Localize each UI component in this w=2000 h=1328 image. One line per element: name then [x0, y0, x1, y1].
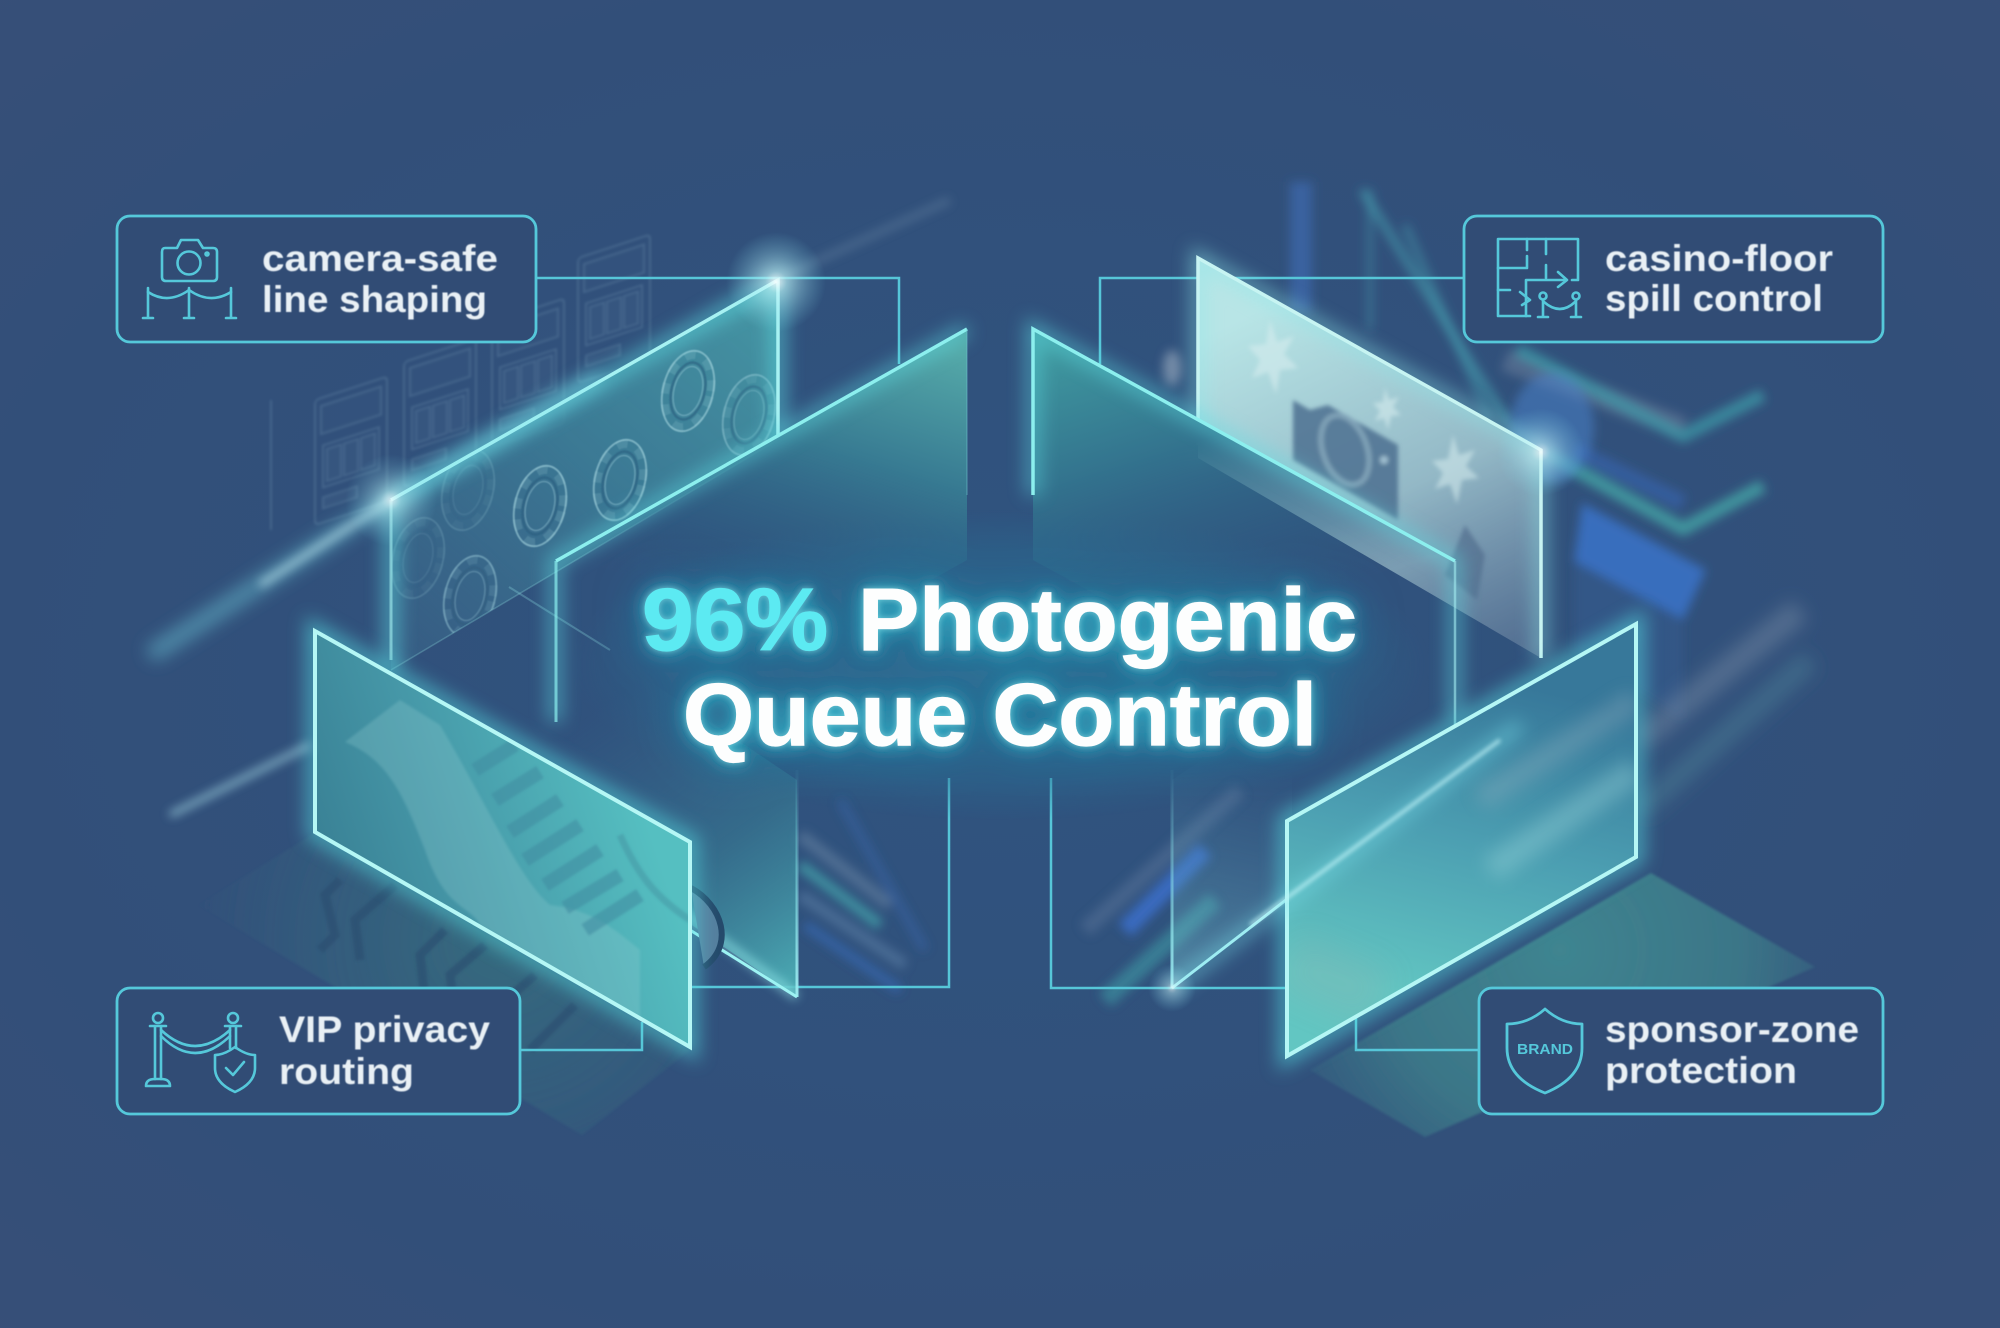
title highlight: 96%: 96% [642, 570, 828, 669]
label: protection [1605, 1050, 1797, 1091]
background illustration: blurred streaks left and centre [800, 790, 1240, 1000]
background illustration: blue block right [1510, 373, 1706, 720]
label: casino-floor [1605, 238, 1833, 279]
panel: front right, sponsor zone [1287, 624, 1636, 1056]
label [279, 1009, 490, 1092]
light streak: through left back panel [150, 200, 950, 655]
floor: right isometric plane [1310, 873, 1815, 1137]
title line 2: Queue Control [683, 665, 1317, 764]
title line 1: Photogenic [858, 570, 1357, 669]
label: camera-safe [262, 238, 498, 279]
chips [384, 345, 783, 642]
title [642, 570, 1357, 764]
connector: sponsor-zone callout to panel [1356, 1018, 1480, 1050]
label: line shaping [262, 279, 487, 320]
light streak: lower left [170, 745, 310, 815]
callout: camera-safe line shaping [117, 216, 536, 342]
light streak: right back panel flare [1497, 408, 1585, 496]
connector: VIP privacy callout to panel [520, 1022, 642, 1050]
connector: lower right bracket [1051, 778, 1288, 988]
panel: back right with camera and sparkles [1198, 258, 1541, 658]
icon: brand shield: BRAND [1517, 1042, 1573, 1058]
callout: VIP privacy routing [117, 988, 520, 1114]
icon: camera over stanchions [143, 240, 236, 318]
label [262, 238, 498, 320]
connector: camera-safe callout to panel [537, 278, 899, 364]
label: sponsor-zone [1605, 1009, 1859, 1050]
label: routing [279, 1051, 414, 1092]
camera and sparkles [1248, 320, 1485, 600]
infographic canvas [116, 178, 1884, 1137]
callout: sponsor-zone protection [1479, 988, 1883, 1114]
background illustration: streaks right of sponsor panel [1640, 610, 1810, 810]
label: VIP privacy [279, 1009, 490, 1050]
label [1605, 1009, 1859, 1091]
panel: front left with escalator [315, 631, 690, 1047]
light streak: across sponsor panel [1148, 725, 1520, 1012]
background illustration: neon shapes upper right [1290, 182, 1763, 529]
callout: casino-floor spill control [1464, 216, 1883, 342]
icon: floor plan with route [1498, 239, 1581, 317]
label: spill control [1605, 278, 1823, 319]
dark round object behind escalator panel [691, 888, 722, 967]
escalator [345, 700, 690, 1020]
floor chevron markings [320, 880, 575, 1050]
panel: centre right main [1033, 329, 1455, 790]
panel: back left with casino chips [384, 280, 783, 670]
floor: left isometric plane [198, 833, 690, 1135]
light flare: top of left back panel [726, 232, 826, 332]
icon: brand shield [1507, 1009, 1582, 1093]
glow behind title [570, 510, 1430, 820]
panel: lower centre left, behind title [509, 587, 797, 997]
background illustration: slot machines [271, 235, 650, 530]
connector: casino-floor callout to panel [1100, 278, 1464, 364]
icon: stanchion with shield [146, 1013, 255, 1092]
small sparkle behind right panel [1163, 350, 1181, 386]
panel: centre left main [555, 329, 967, 790]
label [1605, 238, 1833, 319]
connector: lower left bracket [690, 778, 949, 987]
panel: lower centre right [1172, 700, 1295, 988]
